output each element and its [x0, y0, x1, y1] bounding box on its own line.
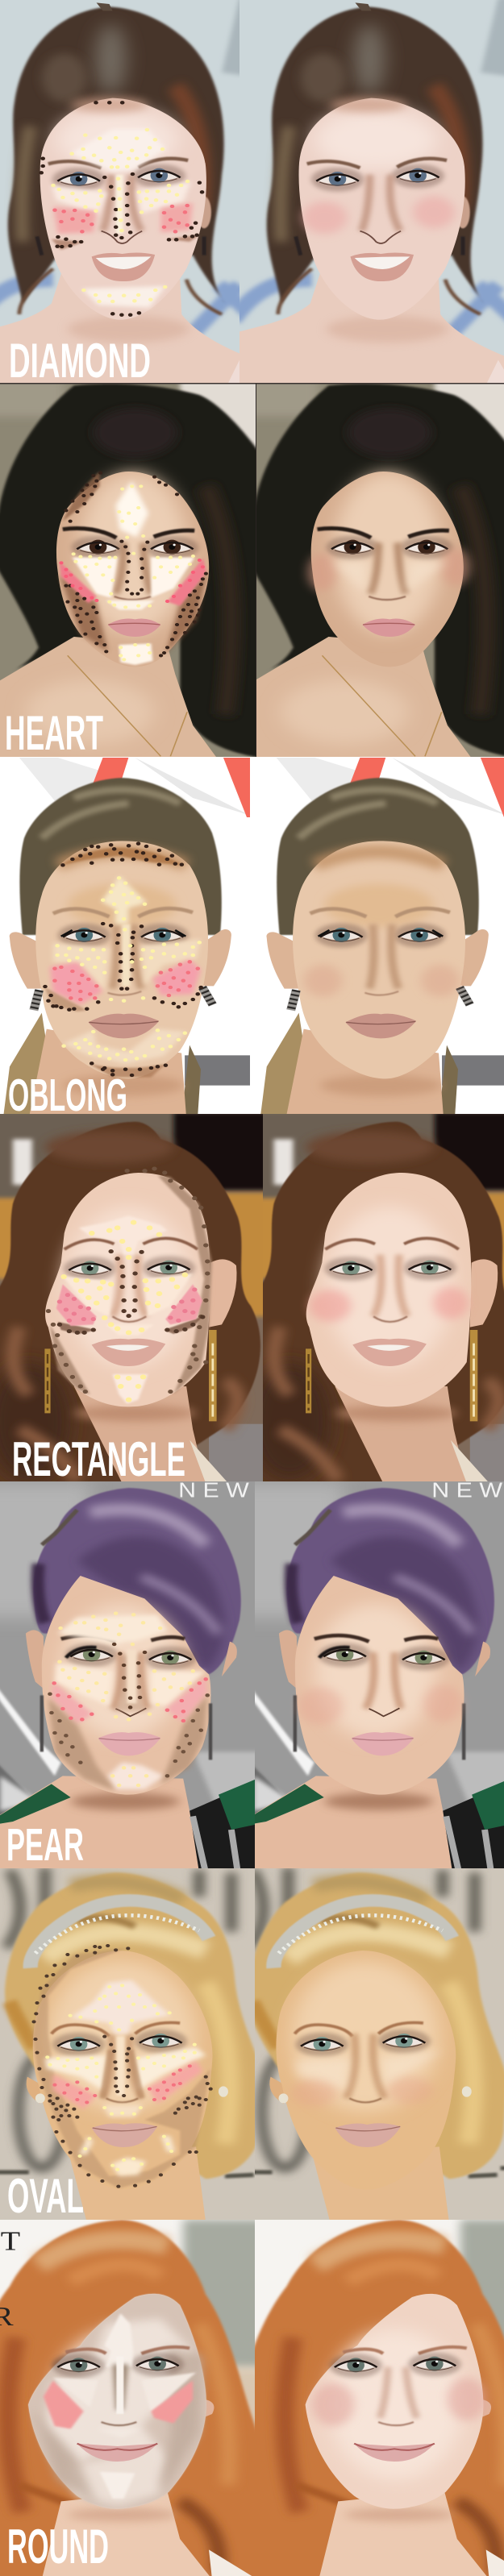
row: oblong face shape	[0, 744, 504, 1136]
heading: OVAL: OVAL	[7, 2169, 84, 2223]
panel: heart contour guide portrait	[0, 384, 256, 757]
panel: rectangle contour guide portrait	[0, 1114, 263, 1481]
panel: diamond contour guide portrait	[0, 0, 240, 383]
row: rectangle face shape	[0, 1107, 504, 1499]
dots: contour	[45, 844, 201, 1075]
row: oval face shape	[0, 1856, 504, 2249]
row: round face shape	[0, 2211, 504, 2576]
panel: round contour guide portrait	[0, 2220, 255, 2576]
dots: contour	[66, 473, 206, 655]
heading: PEAR: PEAR	[6, 1819, 84, 1871]
heading: ROUND: ROUND	[7, 2520, 109, 2574]
row: pear face shape	[0, 1477, 504, 1872]
magazine backdrop letters	[0, 2226, 20, 2331]
panel: oval finished portrait	[255, 1868, 504, 2220]
panel: rectangle finished portrait	[263, 1114, 504, 1481]
panel: heart finished portrait	[256, 384, 504, 757]
panel: pear contour guide portrait	[0, 1481, 255, 1868]
panel: diamond finished portrait	[240, 0, 504, 383]
panel: oblong finished portrait	[260, 758, 504, 1114]
dots: contour	[41, 102, 202, 315]
heading: HEART: HEART	[5, 706, 103, 760]
panel: oblong contour guide portrait	[3, 758, 250, 1114]
heading: DIAMOND: DIAMOND	[9, 334, 151, 388]
dots: contour	[34, 1946, 210, 2187]
magazine backdrop letters: T	[1, 2226, 20, 2256]
panel: pear finished portrait	[255, 1481, 504, 1868]
row: diamond face shape	[0, 0, 504, 388]
heading: RECTANGLE: RECTANGLE	[12, 1432, 185, 1486]
panel: oval contour guide portrait	[0, 1868, 255, 2220]
dots: contour	[48, 1169, 207, 1392]
panel: round finished portrait	[255, 2220, 504, 2576]
heading: OBLONG: OBLONG	[8, 1070, 127, 1121]
dots: contour	[114, 1644, 145, 1707]
row: heart face shape	[0, 373, 504, 766]
